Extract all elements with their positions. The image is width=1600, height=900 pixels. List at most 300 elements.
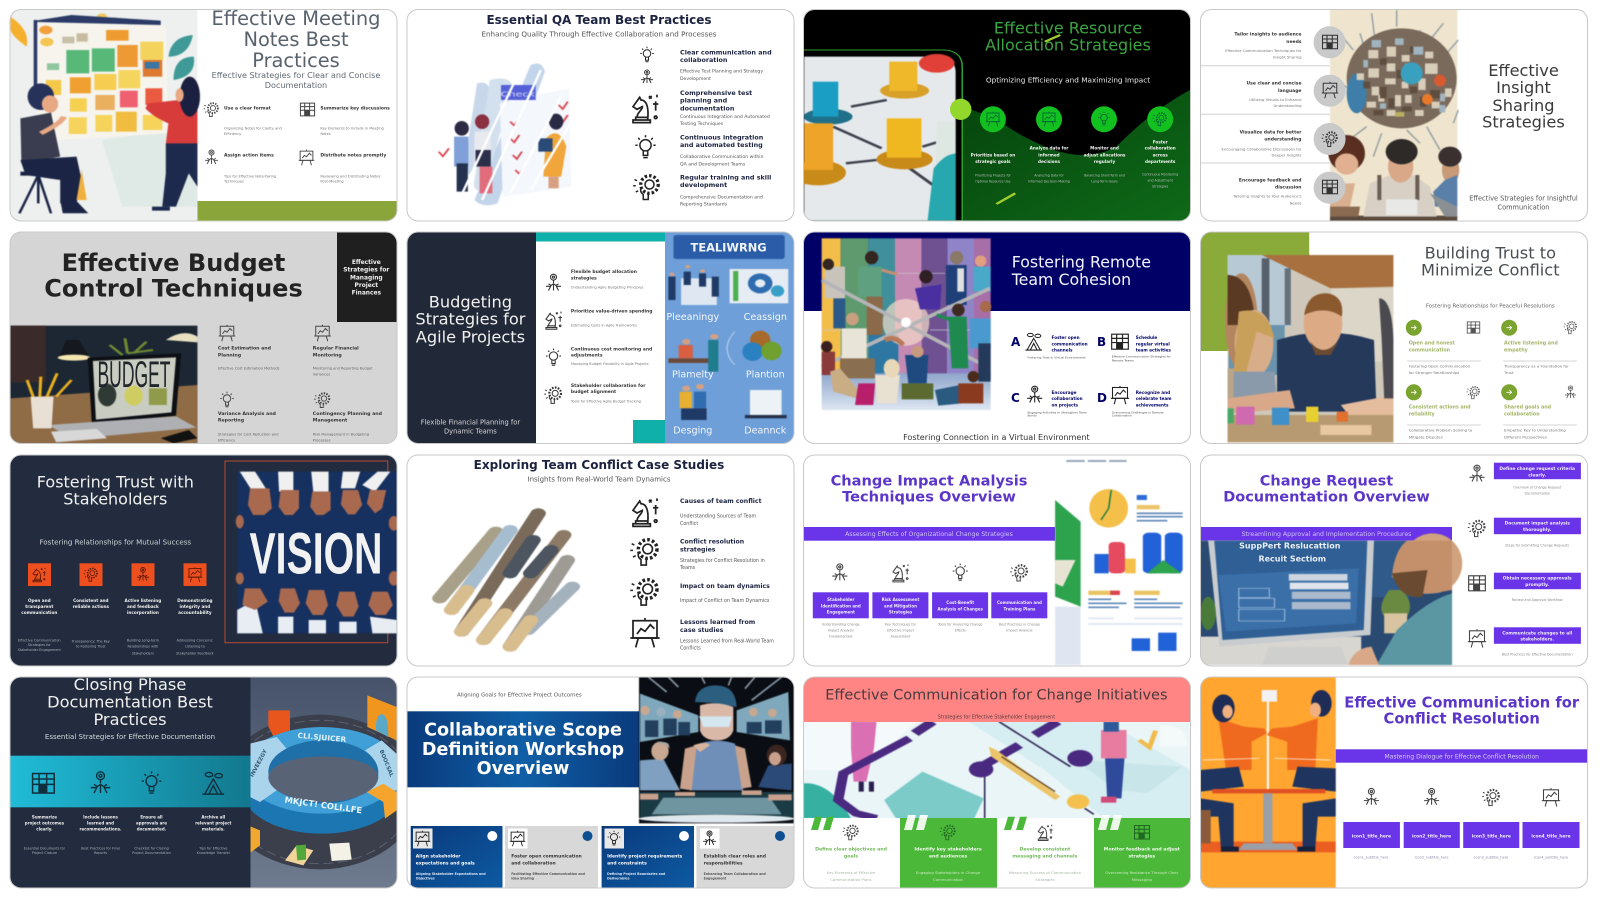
item: variance analysis: Reporting: [218, 418, 244, 424]
icon: bulb: [640, 47, 654, 62]
item labels: accountability: [178, 610, 212, 615]
band icons: [33, 771, 224, 794]
item: regular monitoring: Monitoring: [313, 352, 342, 358]
item D: Overcoming Challenges in Remote: [1112, 410, 1164, 414]
item B: Schedule: [1136, 335, 1157, 340]
column 3: messaging and channels: [1012, 853, 1078, 859]
title: Overview: [477, 759, 569, 779]
slide background: [804, 455, 1190, 667]
step card 1: Aligning Stakeholder Expectations and: [416, 872, 486, 876]
item labels: and feedback: [127, 604, 159, 609]
item 4: Stakeholder collaboration for: [571, 383, 646, 389]
dark callout box: Project: [355, 283, 378, 289]
item: summarize key discussions: Summarize key discussions: [320, 105, 390, 111]
item descriptions: [975, 172, 1178, 188]
item descriptions: Best Practices for Final: [81, 846, 120, 850]
item D: achievements: [1136, 403, 1169, 408]
title: Notes Best: [243, 28, 349, 51]
item 1: Effective Test Planning and Strategy: [680, 69, 763, 75]
icon circles: [1314, 26, 1346, 204]
step 4: Communicate changes to all: [1502, 630, 1573, 636]
illustration: flow map with figures: [804, 722, 1190, 820]
item descriptions: Stakeholder Feedback: [176, 651, 214, 655]
title: Control Techniques: [44, 275, 303, 303]
salmon header: [804, 677, 1190, 722]
subtitle: Documentation: [265, 80, 327, 90]
illustration: circular project lifecycle: MKJCT! COLI.LFE: [284, 795, 363, 815]
item 4: Reporting Standards: [680, 202, 728, 208]
item: cost estimation: Effective Cost Estimation Methods: [218, 366, 280, 370]
items: Active listening and: [1504, 340, 1558, 346]
photo: remote team with coloured backdrop: [821, 238, 991, 410]
items: Different Perspectives: [1504, 434, 1547, 439]
icon: knight: [546, 312, 562, 329]
tile labels: [821, 597, 1042, 615]
subtitle: Optimizing Efficiency and Maximizing Impact: [986, 75, 1150, 84]
item descriptions: [24, 846, 231, 855]
step card 2: Idea Sharing: [511, 876, 535, 880]
item descriptions: Stakeholders: [132, 651, 154, 655]
title: Effective Communication for Change Initiatives: [825, 687, 1168, 703]
title: Practices: [93, 710, 167, 729]
list items: Deeper Insights: [1272, 153, 1302, 158]
item B: Effective Communication Strategies for: [1112, 355, 1172, 359]
item labels: Active listening: [125, 598, 161, 603]
icon: knight: [633, 498, 658, 526]
item descriptions: Analyzing Data for: [1034, 174, 1064, 178]
title: Effective Resource: [994, 18, 1142, 37]
item 4: [570, 383, 646, 404]
icon glyphs: [986, 112, 1166, 126]
step card 3: Identify project requirements: [607, 853, 683, 859]
item 2: strategies: [680, 547, 716, 554]
item: distribute notes promptly: [320, 153, 386, 184]
items: empathy: [1504, 347, 1529, 353]
card border: [1200, 232, 1588, 444]
title: Fostering Trust with: [37, 472, 194, 491]
item labels: transparent: [25, 604, 53, 609]
step card 2: Foster open communication: [511, 853, 582, 859]
slide background: [407, 232, 794, 444]
title: Strategies: [1482, 113, 1565, 132]
slide background gradient: [812, 90, 1190, 220]
icons row: [1364, 788, 1560, 806]
item labels: incorporation: [127, 610, 159, 615]
icons: [1467, 322, 1576, 399]
item labels: learned and: [87, 820, 114, 825]
title: Definition Workshop: [422, 740, 624, 760]
item descriptions: [18, 638, 214, 655]
tile descriptions: Tools for Analyzing Change: [937, 623, 982, 627]
placeholder subtitles: [1354, 856, 1568, 860]
title: Strategies for: [415, 309, 526, 328]
tile descriptions: Understanding Change: [822, 623, 860, 627]
tile labels: Identification and: [821, 603, 861, 608]
column 3: Strategies: [1035, 877, 1055, 882]
item: use a clear format: Use a clear format: [224, 105, 272, 111]
navy header: [804, 232, 1190, 311]
title: Budgeting: [429, 293, 512, 312]
step card 3: Defining Project Boundaries and: [607, 872, 666, 876]
slide background: [1200, 10, 1588, 222]
item labels: recommendations.: [79, 827, 122, 832]
title: Effective: [1488, 61, 1559, 80]
tile descriptions: Impact Analysis: [1006, 629, 1033, 633]
item 4: Conflicts: [680, 645, 701, 651]
slide background: [10, 455, 397, 667]
column 1: goals: [844, 853, 858, 859]
list items: Utilizing Visuals to Enhance: [1249, 97, 1302, 102]
item labels: project outcomes: [25, 820, 65, 825]
item labels: integrity and: [180, 604, 210, 609]
list items: Effective Communication Techniques for: [1225, 48, 1302, 53]
illustration labels: [666, 312, 787, 436]
item B: [1097, 334, 1172, 363]
item: contingency planning: Processes: [313, 439, 331, 443]
footer caption: Fostering Connection in a Virtual Environment: [903, 432, 1090, 442]
step 1: clearly.: [1528, 472, 1546, 478]
title: Fostering Remote: [1012, 252, 1151, 271]
item labels: Archive all: [201, 814, 226, 819]
icon: financial monitor: [314, 325, 331, 341]
item labels: Consistent and: [73, 598, 109, 603]
item labels: Ensure all: [140, 814, 163, 819]
item 2: Conflict resolution: [680, 539, 744, 546]
step card 1: [411, 826, 502, 888]
item labels: Analyze data for: [1030, 146, 1069, 151]
step 1: Define change request criteria: [1499, 466, 1575, 472]
list items: Tailoring Insights to Your Audience's: [1232, 193, 1302, 198]
item labels: Open and: [28, 598, 51, 603]
items: reliability: [1409, 411, 1436, 417]
tile descriptions: Fundamentals: [829, 635, 853, 639]
item labels: across: [1153, 152, 1168, 157]
list items: Encourage feedback and: [1239, 178, 1302, 184]
placeholder titles: [1352, 833, 1571, 839]
item 2: Estimating Costs in Agile Frameworks: [571, 323, 637, 327]
illustration header label: TEALIWRNG: [691, 241, 767, 255]
tile labels: Engagement: [827, 610, 855, 615]
item labels: Demonstrating: [177, 598, 213, 603]
card border: [1200, 10, 1588, 221]
card border: [1200, 677, 1588, 888]
title: Team Cohesion: [1011, 270, 1131, 289]
tile labels: Risk Assessment: [882, 597, 920, 602]
step 4: stakeholders.: [1520, 637, 1554, 643]
title: Exploring Team Conflict Case Studies: [474, 458, 724, 472]
item 4: budget alignment: [571, 389, 617, 395]
orange icon tiles: [28, 563, 206, 586]
illustration: circular project lifecycle: CLI.SJUICER: [297, 731, 347, 744]
photo: hands around VISION: [236, 472, 399, 633]
icon: gear trophy: [630, 540, 657, 565]
item labels: [21, 598, 213, 615]
column 4: strategies: [1128, 853, 1155, 859]
title: Essential QA Team Best Practices: [486, 13, 712, 27]
footer bar: [197, 201, 397, 222]
item labels: adjust allocations: [1084, 152, 1126, 157]
card border: [407, 677, 794, 888]
step card 4: [696, 826, 794, 888]
item 1: collaboration: [680, 56, 728, 64]
step 3: Review and Approval Workflow: [1512, 598, 1563, 602]
arrow glyphs: [1411, 326, 1512, 394]
items: Shared goals and: [1504, 404, 1552, 410]
item D: celebrate team: [1136, 396, 1172, 401]
column 3: Measuring Success of Communication: [1009, 870, 1082, 875]
panel: Essential QA Team Best Practices: [438, 14, 772, 206]
slide background: [10, 10, 397, 222]
item: assign action items: Assign action items: [224, 153, 274, 159]
item 4: Lessons learned from: [680, 619, 755, 626]
list items: Encouraging Collaborative Discussions for: [1222, 146, 1302, 151]
icon: gear bulb: [630, 580, 657, 605]
placeholder titles: icon4_title_here: [1531, 833, 1571, 839]
photo: futuristic workshop: [638, 677, 796, 823]
item labels: communication: [21, 610, 57, 615]
item C: Encourage: [1052, 390, 1077, 395]
item 3: [571, 346, 652, 366]
tile descriptions: Assessment: [891, 635, 911, 639]
column 1: Define clear objectives and: [815, 846, 887, 852]
panel: Collaborative Scope Definition Workshop Overview: [407, 677, 796, 889]
item: contingency planning: [313, 411, 382, 443]
item labels: [25, 814, 231, 832]
item 4: Tools for Effective Agile Budget Tracking: [570, 400, 641, 404]
item labels: materials.: [202, 827, 225, 832]
column 4: Monitor feedback and adjust: [1104, 846, 1181, 852]
card border: [804, 455, 1190, 666]
item: use a clear format: Efficiency: [224, 132, 242, 136]
item C: on projects: [1052, 403, 1079, 408]
item descriptions: Strategies: [1152, 184, 1169, 188]
icons row: [832, 564, 1027, 582]
icon: cost board: [219, 325, 235, 341]
purple subtitle band: Assessing Effects of Organizational Change Strategies: [845, 531, 1013, 538]
list items: Use clear and concise: [1247, 81, 1302, 87]
blue title band: [407, 711, 639, 787]
list items: needs: [1286, 39, 1302, 45]
item 2: Prioritize value-driven spending: [571, 308, 652, 314]
item 4: [680, 173, 771, 208]
process icons: [1468, 465, 1486, 647]
list items: understanding: [1264, 137, 1302, 143]
column 2: Identify key stakeholders: [914, 846, 982, 852]
illustration labels: Desging: [673, 425, 712, 436]
item 1: Development: [680, 76, 711, 82]
step card 1: expectations and goals: [416, 860, 475, 866]
photo in diagonal strips: [440, 513, 572, 647]
dashboard illustration: [1055, 461, 1183, 665]
item labels: reliable actions: [73, 604, 110, 609]
slide background: [10, 232, 397, 444]
card border: [407, 10, 794, 221]
item 4: Lessons Learned from Real-World Team: [680, 638, 774, 644]
item: use a clear format: [224, 105, 282, 136]
panel: Budgeting Strategies for Agile Projects: [407, 232, 794, 444]
title: Effective Meeting: [212, 7, 380, 30]
item 2: Testing Techniques: [679, 121, 724, 127]
icon circles: [980, 106, 1173, 132]
item 2: documentation: [680, 104, 735, 112]
item B: B: [1097, 335, 1106, 349]
item 3: Collaborative Communication within: [680, 154, 764, 160]
item descriptions: Transparency: The Key: [71, 639, 110, 643]
panel: Building Trust to Minimize Conflict: [1200, 232, 1588, 444]
purple subtitle band: [804, 527, 1055, 541]
item 3: Impact on team dynamics: [680, 583, 770, 590]
item labels: Include lessons: [83, 814, 118, 819]
card border: [407, 232, 794, 444]
items: Fostering Open Communication: [1409, 364, 1471, 369]
item 3: and automated testing: [680, 141, 763, 149]
items: collaboration: [1504, 411, 1540, 417]
item descriptions: Building Long-term: [127, 639, 160, 643]
items: Mitigate Disputes: [1409, 434, 1443, 439]
item 2: [679, 539, 765, 571]
item labels: Prioritize based on: [971, 152, 1015, 157]
item descriptions: Continuous Monitoring: [1142, 172, 1178, 176]
photo: colleagues around a table: [1225, 255, 1393, 442]
card border: [10, 232, 397, 444]
item 1: Understanding Agile Budgeting Principles: [571, 285, 644, 289]
card border: [804, 677, 1190, 888]
slide background: [1200, 677, 1588, 889]
list items: Tailor insights to audience: [1234, 32, 1302, 38]
list items: Needs: [1290, 200, 1302, 205]
items: Consistent actions and: [1409, 404, 1471, 410]
card border: [10, 677, 397, 888]
list items: Understanding: [1274, 103, 1302, 108]
icon: spider network: [641, 70, 653, 83]
item A: channels: [1052, 348, 1073, 353]
item: variance analysis: Variance Analysis and: [218, 411, 276, 417]
green corner block: [1200, 232, 1309, 351]
illustration panel: planning infographic: [665, 232, 794, 444]
item: assign action items: Tips for Effective Note-Taking: [223, 174, 276, 178]
item: contingency planning: Risk Management in Budgeting: [313, 433, 369, 437]
photo: laptop showing BUDGET: BUDGET: [98, 354, 170, 395]
item 1: Understanding Sources of Team: [680, 514, 757, 520]
slide background: [407, 10, 794, 222]
item: cost estimation: Cost Estimation and: [218, 345, 271, 351]
icon: person: [205, 150, 218, 164]
step 2: Document impact analysis: [1505, 521, 1570, 527]
tile labels: Strategies: [889, 610, 913, 615]
item 1: Conflict: [680, 521, 698, 527]
column 4: Messaging: [1132, 877, 1152, 882]
column 3: [997, 817, 1094, 889]
item: regular monitoring: [313, 345, 373, 377]
tile descriptions: Best Practices in Change: [999, 623, 1040, 627]
item D: D: [1097, 391, 1107, 405]
slide background: [10, 677, 397, 889]
item labels: collaboration: [1145, 146, 1176, 151]
item descriptions: Effective Communication: [18, 638, 61, 642]
icon: target: [204, 103, 218, 117]
item: summarize key discussions: [320, 105, 390, 136]
step card 3: and constraints: [607, 860, 647, 866]
step 4: [1494, 627, 1581, 656]
item labels: strategic goals: [975, 159, 1011, 164]
tile descriptions: Impact Analysis: [828, 629, 854, 633]
items: Open and honest: [1409, 340, 1456, 346]
items: Collaborative Problem Solving to: [1409, 428, 1473, 433]
item: variance analysis: [218, 411, 278, 443]
item: cost estimation: [218, 345, 280, 370]
item labels: regularly: [1094, 159, 1115, 164]
placeholder titles: icon3_title_here: [1472, 833, 1511, 839]
separator lines: [1200, 66, 1330, 163]
teal band: [10, 756, 251, 807]
panel: Effective Insight Sharing Strategies: [1200, 9, 1588, 223]
item descriptions: Essential Documents for: [24, 846, 66, 850]
black upper shape: [800, 7, 1193, 220]
item 4: Regular training and skill: [680, 173, 771, 181]
item descriptions: Project Documentation: [132, 851, 171, 855]
subtitle: Flexible Financial Planning for: [421, 418, 520, 426]
item 3: Continuous integration: [680, 133, 764, 141]
placeholder subtitles: icon4_subtitle_here: [1534, 856, 1568, 860]
icon: contingency: [314, 393, 329, 408]
purple subtitle band: Streamlining Approval and Implementation Procedures: [1242, 531, 1411, 538]
tile labels: and Mitigation: [884, 603, 917, 608]
item: regular monitoring: Regular Financial: [313, 345, 359, 351]
subtitle: Essential Strategies for Effective Documentation: [45, 733, 215, 741]
teal corner block: [633, 420, 665, 444]
step 1: Overview of Change Request: [1513, 486, 1562, 490]
item: contingency planning: Management: [313, 418, 348, 424]
icon glyphs: [1322, 35, 1338, 194]
step 2: [1494, 518, 1581, 547]
icon: tactic board: [630, 618, 660, 647]
illustration labels: Pleeaningy: [666, 312, 719, 323]
item descriptions: Informed Decision-Making: [1028, 180, 1070, 184]
item 2: [679, 89, 770, 127]
items: communication: [1409, 347, 1451, 353]
title: Allocation Strategies: [985, 36, 1151, 55]
step 3: Obtain necessary approvals: [1503, 576, 1572, 582]
placeholder subtitles: icon1_subtitle_here: [1354, 856, 1388, 860]
item 3: [680, 133, 764, 168]
item descriptions: Addressing Concerns:: [177, 639, 213, 643]
item: distribute notes promptly: Distribute notes promptly: [320, 153, 386, 159]
item 4: case studies: [680, 627, 724, 634]
subtitle: Enhancing Quality Through Effective Collaboration and Processes: [481, 29, 717, 38]
column 3: Develop consistent: [1020, 846, 1071, 852]
purple subtitle band: [1200, 527, 1452, 541]
title: Techniques Overview: [842, 489, 1016, 506]
card border: [10, 10, 397, 221]
photo: hands around VISION: VISION: [250, 521, 382, 586]
item C: Engaging Activities to Strengthen Team: [1028, 410, 1087, 414]
item B: Remote Teams: [1112, 359, 1134, 363]
item 3: [680, 583, 770, 604]
step card 2: [505, 826, 598, 888]
title: Practices: [252, 49, 340, 72]
item 4: Comprehensive Documentation and: [680, 195, 763, 201]
column 4: Overcoming Resistance Through Clear: [1105, 870, 1179, 875]
column 2: Engaging Stakeholders in Change: [916, 870, 981, 875]
title: Agile Projects: [416, 327, 525, 346]
card border: [10, 455, 397, 666]
column 1: [804, 817, 900, 889]
illustration labels: Deannck: [744, 425, 787, 436]
step card 2: and collaboration: [511, 860, 556, 866]
step 1: [1494, 463, 1581, 495]
card border: [407, 455, 794, 666]
item: cost estimation: Planning: [218, 352, 241, 358]
